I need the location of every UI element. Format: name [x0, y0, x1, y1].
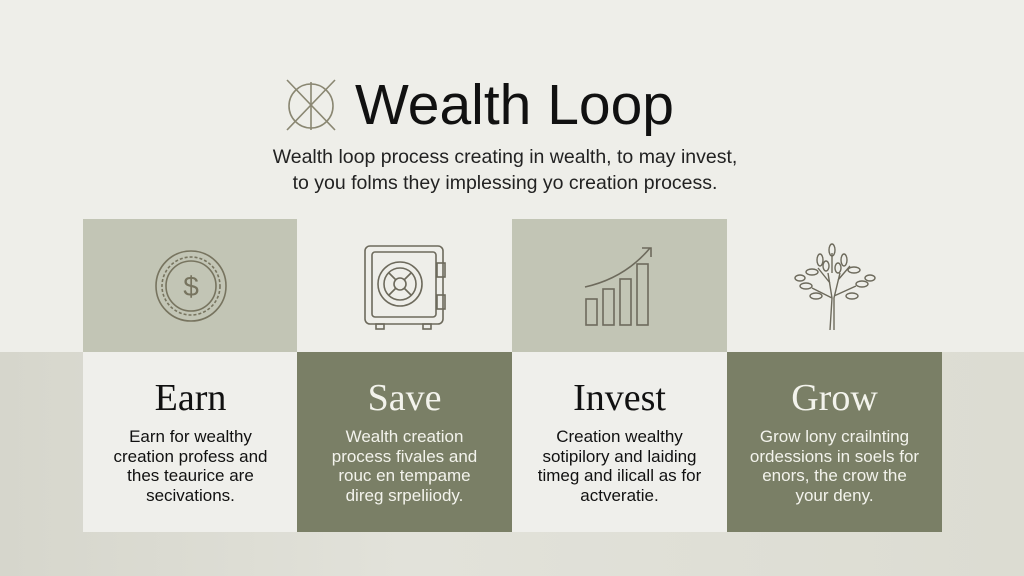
panel: earn text: secivations.: [146, 486, 235, 504]
subtitle: [272, 146, 737, 194]
subtitle: Wealth loop process creating in wealth, to may invest,: [273, 146, 737, 168]
panel: save text: process fivales and: [332, 446, 477, 466]
panel: grow text: enors, the crow the: [762, 466, 907, 485]
panel: grow text: your deny.: [795, 486, 874, 504]
panel: earn text: thes teaurice are: [127, 466, 254, 485]
panel: invest text: sotipilory and laiding: [542, 446, 697, 466]
panel: invest text: Creation wealthy: [556, 427, 683, 446]
panel: grow text: [727, 352, 942, 532]
panel: earn text: Earn for wealthy: [129, 427, 252, 446]
panel: invest text: actveratie.: [580, 486, 659, 504]
panel: invest text: Invest: [573, 377, 666, 419]
panel: invest text: timeg and ilicall as for: [538, 466, 701, 485]
title: [286, 73, 674, 137]
panel: save icon: [297, 219, 512, 352]
panel: earn text: creation profess and: [113, 446, 268, 466]
panel: grow text: Grow lony crailnting: [760, 427, 909, 446]
panel: earn icon: $: [183, 270, 199, 302]
panel: save text: Wealth creation: [346, 427, 463, 446]
panel: earn text: [83, 352, 298, 532]
panel: earn text: Earn: [155, 377, 226, 419]
subtitle: to you folms they implessing yo creation process.: [293, 172, 717, 194]
panel: grow text: ordessions in soels for: [750, 446, 919, 466]
heading: Wealth Loop: [355, 73, 674, 137]
icon: loop mark: [286, 80, 336, 130]
panel: save text: rouc en tempame: [338, 466, 471, 485]
panel: save text: [297, 352, 512, 532]
panel: save text: direg srpeliiody.: [346, 486, 463, 504]
panel: save text: Save: [368, 377, 441, 419]
panel: earn icon: [83, 219, 298, 352]
panel: grow icon: [727, 219, 942, 352]
panel: invest icon: [512, 219, 727, 352]
panel: grow text: Grow: [791, 377, 878, 419]
panel: invest text: [512, 352, 727, 532]
